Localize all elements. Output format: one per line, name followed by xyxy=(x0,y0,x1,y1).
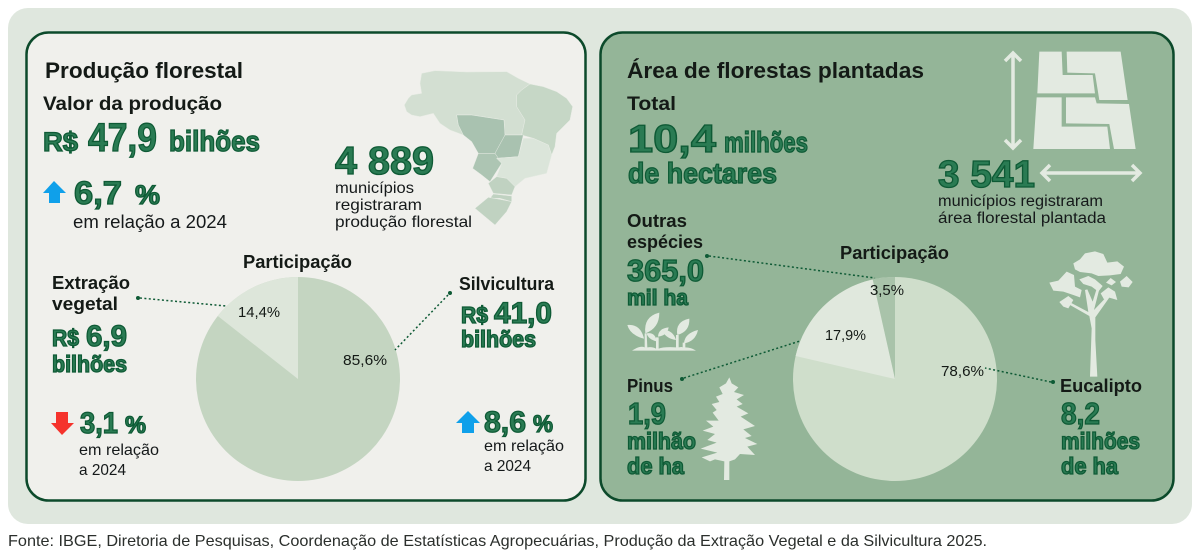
block: silvicultura: em relação xyxy=(484,438,564,455)
block: extração vegetal: a 2024 xyxy=(79,462,126,479)
heading: participação: Participação xyxy=(840,243,949,263)
variation: total: em relação a 2024 xyxy=(73,211,227,232)
leader line: eucalipto xyxy=(985,368,1055,384)
variation: total xyxy=(43,175,227,232)
block: silvicultura: a 2024 xyxy=(484,458,531,475)
block: pinus: de ha xyxy=(627,453,684,479)
stat: municípios: produção florestal xyxy=(335,214,472,231)
block: total xyxy=(627,93,808,190)
block: valor da produção: Valor da produção xyxy=(43,93,222,115)
stat: municípios: registraram xyxy=(335,197,422,214)
block: pinus: milhão xyxy=(627,428,696,454)
block: outras espécies: espécies xyxy=(627,231,703,252)
block: extração vegetal: vegetal xyxy=(52,293,118,314)
block: valor da produção xyxy=(43,93,260,160)
pie chart: participação área: 17,9% xyxy=(825,327,866,344)
stat: municípios xyxy=(938,154,1106,227)
block: extração vegetal xyxy=(51,272,159,479)
block: silvicultura: % xyxy=(533,411,553,438)
stat: municípios xyxy=(335,140,472,231)
block: extração vegetal: 6,9 xyxy=(86,320,127,353)
stat: municípios: municípios registraram xyxy=(938,193,1103,210)
block: valor da produção: R$ xyxy=(43,127,78,157)
block: silvicultura: 41,0 xyxy=(494,297,552,330)
icon: seedlings xyxy=(627,313,698,351)
leader line: pinus xyxy=(680,341,800,381)
arrow: horizontal xyxy=(1042,165,1140,181)
pie chart: participação produção: 85,6% xyxy=(343,352,387,369)
pie chart: participação área: 3,5% xyxy=(870,282,904,299)
block: valor da produção: bilhões xyxy=(169,126,260,158)
pie chart: participação área: 78,6% xyxy=(941,363,984,380)
block: total: milhões xyxy=(724,127,808,159)
block: outras espécies: mil ha xyxy=(627,285,689,310)
icon: land plots xyxy=(1033,52,1136,149)
block: outras espécies: Outras xyxy=(627,210,687,231)
pie chart: participação produção xyxy=(196,277,400,481)
variation: total: 6,7 xyxy=(74,175,122,211)
block: outras espécies xyxy=(627,210,704,310)
block: extração vegetal: R$ xyxy=(52,325,79,351)
heading: área de florestas plantadas: Área de florestas plantadas xyxy=(627,58,924,83)
stat: municípios: 3 541 xyxy=(938,154,1035,196)
stat: municípios: 4 889 xyxy=(335,140,434,183)
block: silvicultura: 8,6 xyxy=(484,406,526,439)
block: total: Total xyxy=(627,93,676,115)
block: pinus: 1,9 xyxy=(628,396,666,431)
block: extração vegetal: bilhões xyxy=(52,351,127,377)
stat: municípios: área florestal plantada xyxy=(938,210,1106,227)
block: outras espécies: 365,0 xyxy=(627,253,704,288)
block: silvicultura: Silvicultura xyxy=(459,273,555,294)
icon: eucalyptus tree xyxy=(1049,251,1133,377)
block: eucalipto: milhões xyxy=(1061,428,1140,454)
block: extração vegetal: 3,1 xyxy=(80,407,118,440)
block: total: 10,4 xyxy=(628,118,716,161)
map: Brazil xyxy=(404,71,573,225)
stat: municípios: municípios xyxy=(335,180,414,197)
panel: área de florestas plantadas xyxy=(600,32,1174,500)
pie chart: participação produção: 14,4% xyxy=(238,304,280,321)
block: silvicultura: R$ xyxy=(461,302,488,328)
pie chart: participação área xyxy=(793,277,997,481)
block: extração vegetal: Extração xyxy=(52,272,130,293)
block: silvicultura: bilhões xyxy=(461,326,536,352)
source note: Fonte: IBGE, Diretoria de Pesquisas, Coordenação de Estatísticas Agropecuárias, Produção da Extração Vegetal e da Silvicultura 2025. xyxy=(8,533,987,550)
block: eucalipto: de ha xyxy=(1061,453,1118,479)
block: eucalipto xyxy=(1060,375,1142,479)
block: extração vegetal: em relação xyxy=(79,442,159,459)
block: pinus: Pinus xyxy=(627,375,673,396)
panel: produção florestal xyxy=(26,32,586,500)
heading: participação: Participação xyxy=(243,252,352,272)
leader line: outras espécies xyxy=(705,254,875,278)
variation: total: % xyxy=(135,180,160,210)
block: pinus xyxy=(627,375,696,479)
heading: produção florestal: Produção florestal xyxy=(45,58,243,83)
block: total: de hectares xyxy=(628,158,777,190)
block: extração vegetal: % xyxy=(125,412,146,439)
leader line: silvicultura xyxy=(395,291,452,350)
block: eucalipto: 8,2 xyxy=(1061,396,1100,431)
leader line: extração xyxy=(136,296,226,306)
icon: pine tree xyxy=(701,377,757,480)
arrow: vertical xyxy=(1005,53,1021,148)
block: silvicultura xyxy=(456,273,564,475)
block: valor da produção: 47,9 xyxy=(88,116,157,160)
block: eucalipto: Eucalipto xyxy=(1060,375,1142,396)
